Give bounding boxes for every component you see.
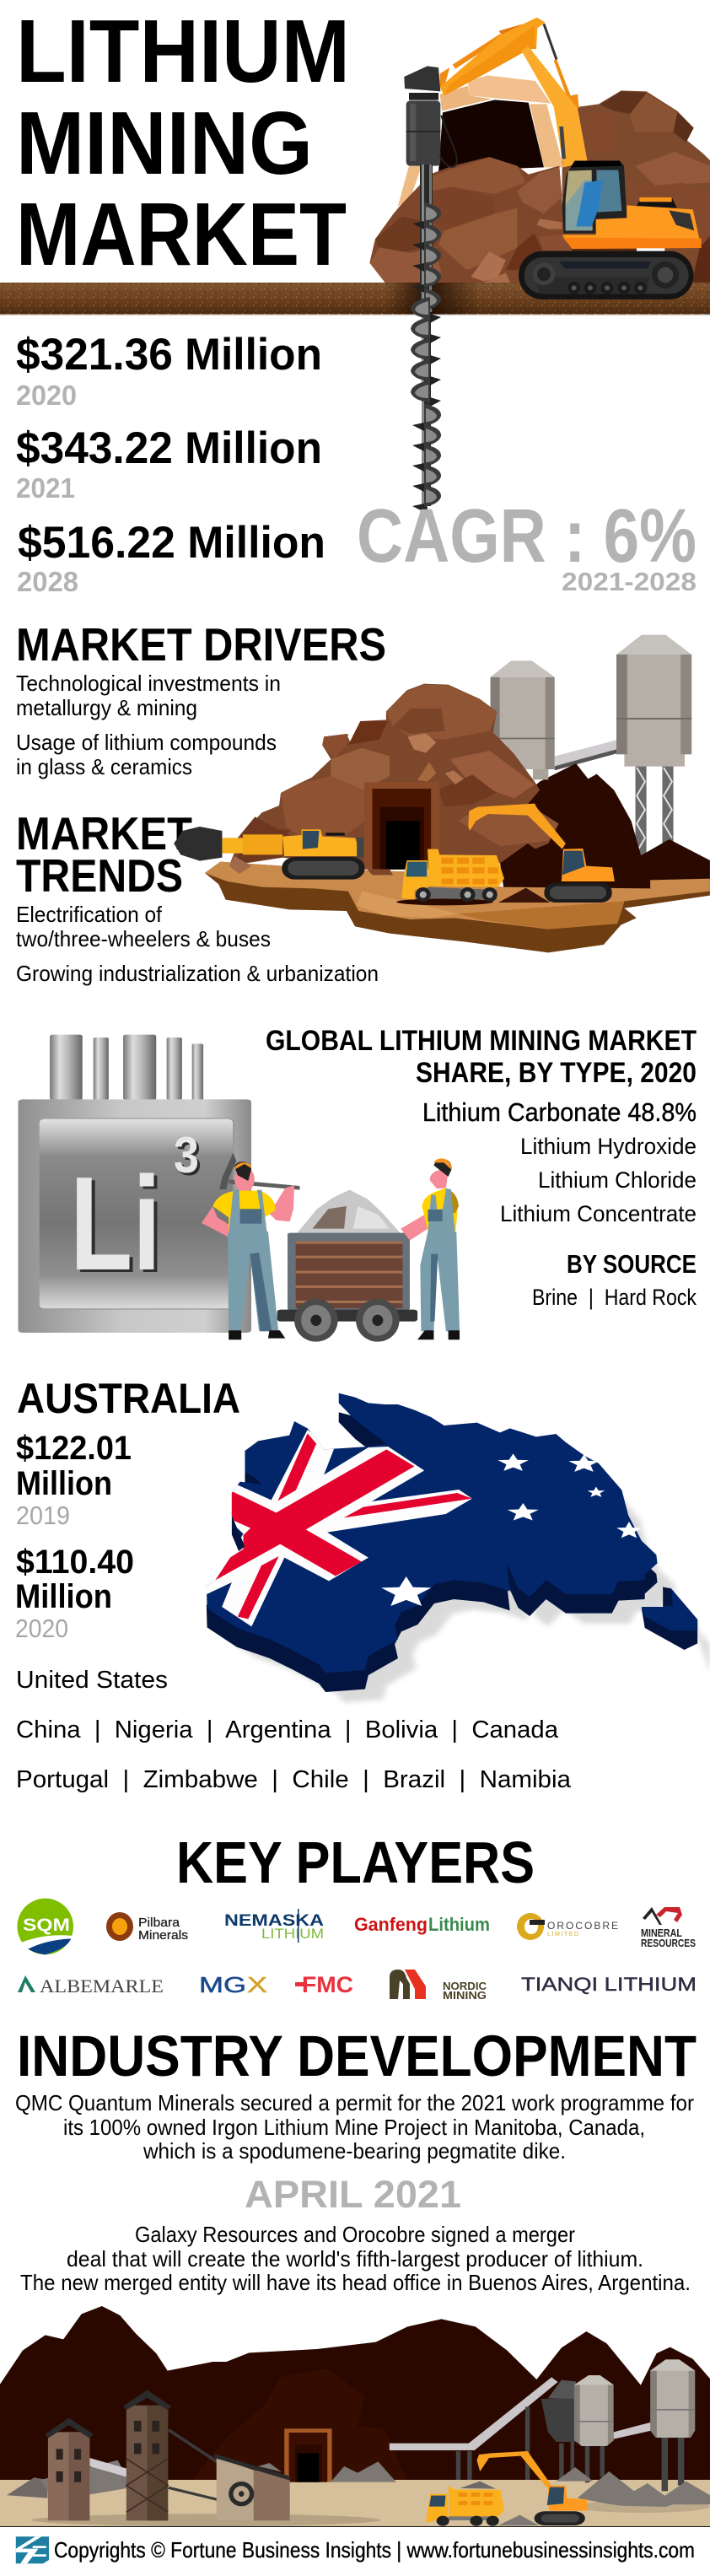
heading: Australia: AUSTRALIA xyxy=(17,1375,240,1422)
mine door xyxy=(364,782,439,870)
stat: Australia 2019: $122.01 xyxy=(16,1430,132,1467)
text: QMC development: its 100% owned Irgon Lithium Mine Project in Manitoba, Canada, xyxy=(63,2115,645,2140)
ground shadow xyxy=(32,2514,380,2526)
logo: SQM xyxy=(17,1899,73,1954)
stat: 2021 market size: $343.22 Million xyxy=(16,423,322,473)
stat: 2020 market size: 2020 xyxy=(16,380,77,411)
dump truck xyxy=(426,2482,504,2526)
dump truck xyxy=(396,849,504,905)
conveyor right xyxy=(390,2377,558,2480)
text: market trends list: two/three-wheelers & buses xyxy=(16,926,271,951)
logo: Nemaska Lithium: NEMASKA xyxy=(224,1912,324,1930)
logo: Nemaska Lithium xyxy=(224,1909,324,1943)
logo: Mineral Resources xyxy=(641,1907,696,1949)
text: QMC development xyxy=(15,2090,694,2164)
list: type segments: Lithium Carbonate 48.8% xyxy=(422,1097,697,1127)
stat: 2020 market size: $321.36 Million xyxy=(16,330,322,380)
map depth xyxy=(207,1412,658,1692)
ore pile xyxy=(297,1190,401,1234)
list: type segments xyxy=(422,1097,697,1226)
logo: Ganfeng Lithium: Ganfeng xyxy=(354,1914,428,1935)
list: countries: China | Nigeria | Argentina | Bolivia | Canada xyxy=(16,1716,559,1743)
stat: 2028 market size: $516.22 Million xyxy=(18,518,325,568)
tower 2 xyxy=(123,2390,171,2520)
illustration: bottom mining landscape xyxy=(0,2306,710,2563)
left silo xyxy=(491,660,555,779)
auger drive head xyxy=(404,66,457,167)
stat: CAGR: 2021-2028 xyxy=(562,567,697,596)
rock mountain xyxy=(229,684,559,869)
ground xyxy=(0,2480,710,2526)
front rock pile xyxy=(369,157,571,283)
list: type segments: Lithium Hydroxide xyxy=(520,1134,697,1159)
right silo xyxy=(650,2359,695,2491)
stat: Australia 2019: Million xyxy=(16,1465,112,1502)
logo: Nordic Mining xyxy=(390,1970,487,2002)
ground band xyxy=(0,283,710,315)
stat: Australia 2020: $110.40 xyxy=(16,1544,134,1581)
text: Galaxy merger: deal that will create the world's fifth-largest producer of lithium. xyxy=(67,2246,643,2272)
logo: Pilbara Minerals: Minerals xyxy=(138,1928,188,1943)
drill machine xyxy=(174,827,393,880)
stat: 2021 market size xyxy=(16,423,322,504)
logo: Orocobre: OROCOBRE xyxy=(547,1920,618,1932)
stat: Australia 2019 xyxy=(16,1430,132,1530)
logo: Ganfeng Lithium xyxy=(354,1914,490,1935)
footer rule xyxy=(0,2526,710,2527)
text: market drivers list: Usage of lithium compounds xyxy=(16,730,277,755)
logo: Mineral Resources: MINERAL xyxy=(641,1927,682,1939)
illustration: mine site with silos, drill machine, truck and excavator xyxy=(174,635,710,952)
logo: Tianqi Lithium: TIANQI LITHIUM xyxy=(521,1974,697,1995)
heading: market trends: TRENDS xyxy=(16,849,183,902)
logo: Nordic Mining: NORDIC xyxy=(443,1980,487,1992)
southern cross stars xyxy=(381,1453,642,1606)
excavator tracks xyxy=(519,251,693,299)
title: MARKET xyxy=(16,185,347,284)
ore cart xyxy=(277,1233,417,1342)
text: market trends list: Electrification of xyxy=(16,902,163,927)
list: countries xyxy=(16,1667,572,1793)
lithium element block xyxy=(18,1035,251,1333)
atomic number: 3 xyxy=(174,1127,199,1183)
excavator body xyxy=(562,197,702,251)
text: QMC development: which is a spodumene-bearing pegmatite dike. xyxy=(143,2138,566,2164)
text: market drivers list: Technological investments in xyxy=(16,671,281,696)
back rock pile xyxy=(562,90,710,283)
text: market drivers list xyxy=(16,671,281,779)
conveyor left xyxy=(89,2458,126,2477)
logo: SQM: SQM xyxy=(23,1916,70,1935)
block body xyxy=(18,1099,251,1333)
logo: Ganfeng Lithium: Lithium xyxy=(428,1914,490,1935)
logo: Orocobre: LIMITED xyxy=(547,1932,578,1937)
logo: MGX: MG xyxy=(199,1972,246,1997)
heading: market trends xyxy=(16,807,192,902)
list: type segments: Lithium Chloride xyxy=(538,1167,697,1193)
mine cavity xyxy=(438,100,544,171)
mine door xyxy=(284,2428,332,2482)
logo: Pilbara Minerals: Pilbara xyxy=(138,1916,180,1930)
logo: Mineral Resources: RESOURCES xyxy=(641,1937,696,1949)
title: MINING xyxy=(16,94,313,193)
list: countries: Portugal | Zimbabwe | Chile | Brazil | Namibia xyxy=(16,1766,572,1793)
conveyor xyxy=(555,740,616,770)
heading: market drivers: MARKET DRIVERS xyxy=(16,618,386,671)
excavator cab xyxy=(562,161,627,234)
hopper ore xyxy=(548,2380,576,2399)
logo: Orocobre xyxy=(517,1913,618,1940)
map: Australia with flag xyxy=(204,1393,710,1702)
heading: key players: KEY PLAYERS xyxy=(176,1830,535,1895)
stat: 2028 market size: 2028 xyxy=(17,566,78,597)
title xyxy=(16,2,350,284)
excavator boom xyxy=(440,18,588,167)
stat: 2021 market size: 2021 xyxy=(16,472,75,504)
text: market drivers list: in glass & ceramics xyxy=(16,754,192,779)
mountains xyxy=(0,2306,710,2482)
Union Jack on map xyxy=(204,1430,472,1626)
logo: Albemarle: ALBEMARLE xyxy=(40,1975,164,1997)
title: LITHIUM xyxy=(16,2,350,101)
heading: global market share by type xyxy=(266,1025,697,1089)
Tasmania shadow xyxy=(663,1609,710,1673)
stat: Australia 2020 xyxy=(15,1544,134,1643)
logo: MGX xyxy=(199,1972,267,1997)
atomic number: 3 xyxy=(176,1129,202,1186)
gravel heaps left xyxy=(7,2460,396,2498)
illustration: miners with ore cart xyxy=(202,1153,460,1342)
element symbol Li: Li xyxy=(73,1152,164,1301)
text: Galaxy merger: Galaxy Resources and Orocobre signed a merger xyxy=(135,2222,575,2247)
stat: Australia 2020: Million xyxy=(15,1578,112,1615)
stat: Australia 2019: 2019 xyxy=(16,1501,70,1530)
stat: Australia 2020: 2020 xyxy=(15,1614,68,1643)
date: April 2021: APRIL 2021 xyxy=(245,2173,461,2216)
list: type segments: Lithium Concentrate xyxy=(500,1201,697,1226)
stat: 2020 market size xyxy=(16,330,322,411)
front dark heaps xyxy=(498,839,710,903)
text: market drivers list: metallurgy & mining xyxy=(16,695,197,720)
map shadow xyxy=(224,1423,675,1702)
conveyor to right silo xyxy=(614,2422,651,2439)
excavator xyxy=(476,2451,588,2525)
gravel heaps right xyxy=(556,2467,710,2513)
stat: 2028 market size xyxy=(17,518,325,597)
platform ground xyxy=(205,862,710,952)
right miner xyxy=(401,1158,460,1339)
tower 1 xyxy=(46,2418,94,2520)
left miner xyxy=(202,1153,299,1339)
map surface xyxy=(207,1393,658,1673)
inner hill xyxy=(191,2369,407,2482)
right silo xyxy=(616,635,691,858)
block inner panel xyxy=(39,1118,234,1309)
illustration: excavator, mine and rocks on ground xyxy=(0,18,710,315)
dark heaps behind xyxy=(514,763,642,886)
logo: Nordic Mining: MINING xyxy=(443,1989,487,2002)
logo: Nemaska Lithium: LITHIUM xyxy=(261,1926,324,1942)
auger drill shaft and flights xyxy=(411,164,441,514)
excavator xyxy=(468,804,615,903)
middle silo xyxy=(559,2375,614,2482)
text: market trends list: Growing industrialization & urbanization xyxy=(16,961,379,986)
logo: MGX: X xyxy=(247,1972,267,1997)
text: market trends list xyxy=(16,902,379,986)
list: countries: United States xyxy=(16,1667,168,1694)
heading: market trends: MARKET xyxy=(16,807,192,860)
list: by source xyxy=(532,1249,697,1310)
batteries on top xyxy=(50,1035,203,1101)
footer logo xyxy=(16,2536,49,2563)
logo: Pilbara Minerals xyxy=(106,1912,188,1943)
hopper xyxy=(541,2398,575,2442)
element symbol Li: Li xyxy=(70,1150,161,1298)
belt crusher xyxy=(169,2430,291,2520)
mine timber frame xyxy=(398,75,563,207)
text: Galaxy merger xyxy=(20,2222,691,2295)
logo: FMC: FMC xyxy=(302,1972,353,1997)
Tasmania xyxy=(642,1587,697,1650)
